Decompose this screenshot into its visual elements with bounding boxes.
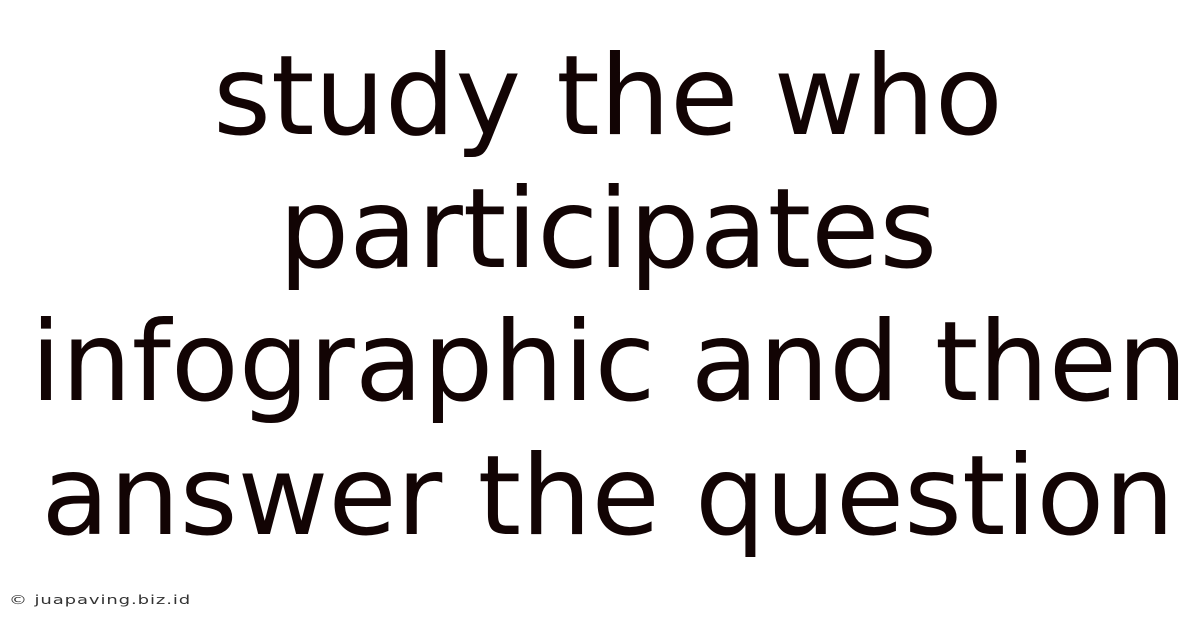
title: participates (279, 165, 937, 294)
title: answer the question (41, 432, 1175, 561)
title: study the who (213, 32, 1003, 161)
watermark: © juapaving.biz.id (9, 593, 191, 607)
title: infographic and then (31, 298, 1187, 427)
